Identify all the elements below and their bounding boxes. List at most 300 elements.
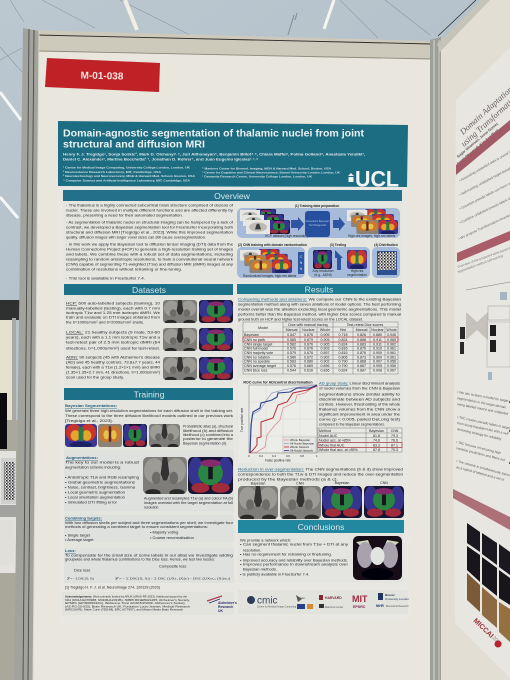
overview diagram: distribution with QR code bbox=[372, 243, 400, 278]
overview diagram: testing: segmentation bbox=[347, 273, 367, 277]
UCL logo: UCL bbox=[355, 166, 399, 192]
bayesian segmentations: likelihood (b) and diffusion bbox=[183, 429, 233, 433]
AD results table: 83.3 bbox=[373, 443, 380, 447]
poster id label bbox=[45, 58, 160, 92]
right poster lower text: segmentation in the target domain. bbox=[457, 396, 507, 410]
logo: Alzheimer's Research UK: Alzheimer's bbox=[218, 601, 237, 605]
augmentations: • Anisotropic T1w and RGB resampling bbox=[65, 474, 139, 480]
results intro text: ground truth on HCP and higher test-retest scores on the LOCAL dataset. bbox=[238, 316, 363, 322]
datasets heading: Datasets bbox=[132, 285, 166, 295]
AD results table: Nuclei acc. at ≈85% bbox=[319, 439, 352, 443]
right poster small bullets bbox=[509, 402, 510, 463]
highlighted row bbox=[243, 337, 398, 342]
background: neighbouring booth and floor at left bbox=[0, 300, 20, 680]
right poster lower text: denoising strategy for reliability bbox=[457, 427, 502, 441]
panel: training bbox=[64, 388, 234, 590]
ROC legend: All-Nuclei Bayesian bbox=[290, 442, 315, 446]
results table: CNN majority vote bbox=[244, 351, 273, 355]
right poster network diagram bbox=[460, 282, 510, 380]
bayesian segmentations: likelihood (c) combined into a bbox=[183, 433, 233, 437]
overview text: combination of resolutions without retraining or fine-tuning. bbox=[66, 266, 182, 272]
results table: 0.585 bbox=[287, 338, 296, 342]
overview diagram: training data preparation: HCP dataset (high resolution) bbox=[265, 234, 308, 238]
results table: 0.718 bbox=[338, 333, 348, 337]
AD group study text: thalamus volumes from the CNN show a bbox=[319, 406, 401, 412]
overview diagram: CNN training: (2) CNN training with domain randomisation bbox=[238, 243, 307, 247]
results table: 0.826 bbox=[357, 333, 366, 337]
combining targets: With two diffusion shells per subject and three segmentations per shell, we investigate four bbox=[65, 520, 234, 525]
AD results table: 79.3 bbox=[391, 434, 398, 438]
overview heading: Overview bbox=[214, 191, 251, 201]
results table: 0.909 bbox=[373, 351, 382, 355]
curve: whole bayesian bbox=[250, 386, 317, 453]
axis labels: 1 bbox=[316, 454, 318, 458]
results table: CNN no rotation bbox=[244, 355, 270, 359]
conclusions text: resolution. bbox=[243, 548, 261, 552]
loss bbox=[64, 548, 234, 583]
AD results table: 76.6 bbox=[391, 439, 398, 443]
results table: 0.962 bbox=[387, 342, 396, 346]
top frame beam bbox=[24, 30, 431, 59]
overview text: · The thalamus is a highly connected subcortical brain structure comprised of dozens of bbox=[66, 202, 234, 208]
results heading: Results bbox=[305, 284, 333, 294]
overview diagram: testing: (3) Testing bbox=[330, 243, 346, 247]
results table: 0.544 bbox=[287, 368, 296, 372]
acknowledgements: Acknowledgements: Work primarily funded by ARUK (ARUK-RF-2023). Additional support by the bbox=[65, 594, 187, 598]
right poster lower text: variation predictions and filters out bbox=[456, 446, 505, 462]
HCP dataset text bbox=[66, 300, 161, 324]
results table: 0.680 bbox=[304, 360, 313, 364]
acknowledgements: (MRC/UKRI), Marie Curie (765148), ERC (677697), and Miriam Marks Brain Research bbox=[65, 608, 183, 612]
overview diagram: training data preparation: Generative Bayesian bbox=[305, 219, 330, 223]
background: exhibition hall ceiling bbox=[0, 0, 510, 320]
HCP dataset text: manually-labelled (testing), each with 0.7 mm bbox=[66, 306, 161, 310]
combining targets bbox=[64, 515, 234, 542]
overview diagram: distribution with QR code: (4) Distribution bbox=[374, 243, 398, 247]
loss: groupwise and whole thalamus contributions to the Dice loss. Hence, we test two losses: bbox=[65, 556, 215, 562]
title: structural and diffusion MRI bbox=[63, 138, 205, 150]
overview text: and labels. We combine these with a robust set of data augmentations, including bbox=[66, 252, 233, 256]
conclusions text: We provide a network which: bbox=[240, 538, 291, 542]
combining targets: methods of generating a combined target to ensure consistent segmentations: bbox=[65, 524, 208, 529]
AD results table: 74.6 bbox=[373, 439, 380, 443]
over-segmentation text: correspondence to both the T1w & DTI images and reduce the over-segmentation bbox=[238, 472, 403, 476]
diagonal roof beam bbox=[437, 0, 490, 52]
conclusions heading: Conclusions bbox=[298, 522, 344, 532]
right poster title: Sugar Ghamsari, Jesse Gomez bbox=[456, 122, 499, 159]
AD results table: Whole thal AUC bbox=[319, 443, 345, 447]
bayesian segmentations: We generate three high-resolution segmentations for each diffusion shell in the training set. bbox=[65, 408, 233, 413]
conclusions heading bbox=[238, 520, 404, 533]
results heading bbox=[237, 284, 402, 294]
right poster image grid bbox=[467, 523, 510, 642]
logo: Brunel and NIHR: NIHR bbox=[376, 604, 384, 608]
AD group study text: of nuclei volumes from the CNN & Bayesian bbox=[319, 386, 400, 390]
augmentations: images overlaid with the target segmentation at full bbox=[144, 501, 233, 505]
logo: Brunel and NIHR: University London bbox=[385, 597, 409, 601]
overview text: (CNN) capable of segmenting T1-weighted (T1w) and diffusion MRI (dMRI) images at any bbox=[66, 262, 233, 266]
affiliations: ⁵ Martinos Center for Biomed. Imaging, MGH & Harvard Med. School, Boston, USA bbox=[202, 166, 332, 170]
results table: 0.956 bbox=[387, 364, 396, 368]
results table: 0.905 bbox=[320, 338, 330, 342]
bayesian segmentations: Probabilistic atlas (a), structural bbox=[183, 424, 233, 428]
overview diagram: testing: High-res bbox=[351, 269, 364, 273]
AD results table: Whole thal acc. at ≈85% bbox=[319, 448, 359, 452]
overview text: · This tool is available in FreeSurfer 7.4. bbox=[66, 276, 145, 280]
results intro text: model overall was the ablation excluding local geometric augmentations. This model bbox=[238, 306, 401, 312]
results table: 0.873 bbox=[357, 355, 366, 359]
over-segmentation text: produced by the Bayesian methods (a & c). bbox=[238, 476, 338, 482]
results intro text: performs better than the Bayesian method, with higher Dice scores compared to manual bbox=[238, 312, 401, 316]
curve: whole network bbox=[250, 386, 317, 453]
logo: MIT and EPSRC bbox=[352, 594, 368, 609]
right poster conference logo bbox=[472, 617, 503, 648]
AD group study text: significant improvement in area under the bbox=[319, 412, 401, 416]
conclusions text bbox=[240, 538, 349, 576]
overview diagram: training data preparation bbox=[237, 204, 400, 238]
ROC chart: ROC curve for AD/control discrimination bbox=[243, 380, 313, 384]
overview diagram: CNN training: Randomized images, high-res labels bbox=[243, 274, 297, 278]
results table: 0.672 bbox=[304, 355, 313, 359]
affiliations bbox=[63, 166, 341, 182]
loss: Dice loss bbox=[74, 568, 90, 572]
dataset images bbox=[163, 300, 233, 382]
loss: Composite loss bbox=[159, 564, 186, 568]
LOCAL dataset text bbox=[66, 330, 161, 350]
affiliations: ⁶ Centre for Cognitive and Clinical Neuroscience, Brunel University London, London, UK bbox=[202, 170, 341, 174]
results table: 0.961 bbox=[387, 351, 396, 355]
conclusions text: • Can segment thalamic nuclei from T1w + DTI at any bbox=[240, 542, 348, 546]
overview diagram: training data preparation: (1) Training data preparation bbox=[295, 204, 339, 208]
ADNI dataset text bbox=[66, 354, 161, 380]
logo: Alzheimer's Research UK: UK bbox=[218, 609, 223, 613]
logo: MIT and EPSRC: EPSRC bbox=[353, 605, 366, 609]
HCP dataset text: the b=1000s/mm² and b=2000s/mm² shells. bbox=[66, 320, 144, 324]
results table: 0.911 bbox=[373, 342, 382, 346]
overview diagram: testing: (e.g., ADNI) bbox=[314, 273, 332, 277]
curve: nuclei network bbox=[250, 385, 317, 453]
logo: Alzheimer's Research UK: Research bbox=[218, 605, 233, 609]
AD group study text: AD group study: Linear discriminant analysis bbox=[319, 380, 400, 386]
AD results table: 70.3 bbox=[391, 448, 398, 452]
results table: 0.616 bbox=[304, 368, 313, 372]
logo: MIT and EPSRC: MIT bbox=[352, 594, 368, 604]
panel: datasets bbox=[64, 284, 233, 385]
right poster lower text: • We aim to learn a model for target bbox=[457, 390, 509, 403]
augmentations: • Local geometric augmentation bbox=[65, 490, 125, 494]
results table: 0.956 bbox=[387, 360, 396, 364]
results table: 0.836 bbox=[320, 368, 330, 372]
overview diagram: CNN training: C bbox=[300, 255, 303, 259]
results table: 0.816 bbox=[338, 347, 348, 351]
results table: 0.867 bbox=[357, 364, 366, 368]
arrow bbox=[291, 217, 304, 231]
augmentations: The key to our model is a robust bbox=[65, 460, 140, 464]
results table: 0.576 bbox=[287, 347, 296, 351]
results table: CNN full model bbox=[244, 347, 268, 351]
overview text bbox=[66, 202, 234, 280]
logo: partners: Brain bbox=[298, 596, 305, 600]
over-segmentation text: Reduction in over-segmentation: The CNN segmentations (b & d) show improved bbox=[238, 466, 403, 472]
right poster lower text: from being fraudulent but with a self bbox=[457, 421, 509, 436]
ADNI dataset text: (AD) and 45 healthy controls, 73.8±7.7 years, 44 bbox=[66, 360, 161, 364]
highlighted row bbox=[318, 443, 402, 447]
results table: 0.790 bbox=[338, 364, 348, 368]
conclusions text: • Improved accuracy and reliability over Bayesian methods. bbox=[240, 558, 348, 562]
results table: Whole bbox=[386, 328, 397, 332]
authors: Daniel C. Alexander¹, Martina Bocchetta²˒⁷, Jonathan D. Rohrer⁷, and Juan Eugenio Iglesias¹˒³˒⁴ bbox=[63, 156, 258, 162]
logo: partners bbox=[296, 595, 344, 609]
augmentations: resolution. bbox=[144, 506, 159, 510]
results table: 0.676 bbox=[304, 347, 313, 351]
logo: cmic: Centre for Medical Image Computing bbox=[257, 606, 297, 608]
logo: Alzheimer's Research UK bbox=[207, 596, 237, 613]
over-segmentation images: CNN bbox=[380, 481, 388, 485]
results table: 0.908 bbox=[373, 368, 382, 372]
results table: 0.907 bbox=[373, 360, 382, 364]
augmentations: • Simulated DTI fitting error bbox=[65, 500, 118, 504]
overview text: · In this work we apply the Bayesian tool to diffusion tensor imaging (DTI) data from the bbox=[66, 242, 234, 246]
results table: 0.876 bbox=[357, 351, 366, 355]
AD group study text: discriminate between AD subjects and bbox=[319, 396, 400, 402]
HCP dataset text: train and evaluate on DTI images obtained from bbox=[66, 314, 161, 320]
title banner bbox=[58, 121, 408, 192]
right poster maroon band 2 bbox=[457, 231, 510, 262]
right poster title: Department of Medical Imaging bbox=[456, 142, 491, 172]
AD group study text: segmentations show similar ability to bbox=[319, 392, 401, 396]
augmentations: augmentation scheme including: bbox=[65, 464, 121, 470]
over-segmentation images: Bayesian bbox=[335, 481, 349, 485]
results table: 0.961 bbox=[387, 347, 396, 351]
training heading bbox=[64, 388, 233, 400]
affiliations: ⁷ Dementia Research Centre, University College London, London, UK bbox=[202, 174, 313, 178]
results table: 0.583 bbox=[287, 360, 296, 364]
LOCAL dataset text: test-retest pair of 2.5 mm isotropic dMRI (64 bbox=[66, 340, 161, 344]
results table: 0.909 bbox=[373, 355, 382, 359]
ROC legend: All-Nuclei Network bbox=[290, 448, 313, 452]
ADNI dataset text: (1.35×1.35×2.7 mm, 41 directions, b=1,000s/mm²) bbox=[66, 370, 161, 374]
AD group study text: compared to the Bayesian segmentations. bbox=[319, 422, 385, 426]
results intro text bbox=[238, 296, 401, 322]
panel: overview bbox=[63, 190, 402, 282]
results table: 0.902 bbox=[320, 360, 330, 364]
AD results table: 81.8 bbox=[373, 434, 380, 438]
conclusions text: • Improves performance in downstream analysis over bbox=[240, 562, 349, 566]
right poster lower text: • TAC creates pseudo labels in target bbox=[457, 415, 510, 430]
title bbox=[63, 128, 365, 150]
results table: 0.883 bbox=[357, 342, 366, 346]
overview diagram: testing bbox=[308, 243, 370, 278]
results table: CNN average target bbox=[244, 364, 276, 368]
conclusions image: white matter rendering bbox=[353, 536, 402, 580]
panel: results bbox=[237, 284, 404, 521]
logo: partners: HARVARD bbox=[325, 596, 342, 600]
overview diagram: training data preparation: Tool Diagnostic bbox=[309, 223, 327, 227]
overview text: Human Connectome Project (HCP) to generate a high-resolution training set of images bbox=[66, 246, 233, 252]
bayesian segmentations: These correspond to the three diffusion likelihood models outlined in our previous work bbox=[65, 413, 233, 418]
overview diagram: CNN training: N bbox=[300, 267, 303, 271]
bayesian segmentations: [Tregidgo et al., 2023]. bbox=[65, 418, 113, 423]
overview heading bbox=[63, 190, 402, 201]
LOCAL dataset text: directions, b=1,000s/mm²) used for test-retest. bbox=[66, 346, 160, 350]
reference: [1] Tregidgo H. F. J. et al. NeuroImage 274, 120129 (2023) bbox=[65, 586, 160, 590]
results table: 0.824 bbox=[338, 338, 348, 342]
right frame post bbox=[430, 37, 441, 680]
bayesian segmentations bbox=[65, 403, 233, 449]
results table: 0.806 bbox=[338, 355, 348, 359]
bayesian segmentations: posterior to generate the bbox=[183, 437, 233, 441]
right poster lower text: using labeled source and unlabeled bbox=[457, 402, 509, 416]
overview diagram: testing: Any resolution bbox=[313, 269, 334, 273]
results table: CNN single target bbox=[244, 342, 272, 346]
right neighbouring board bbox=[436, 0, 510, 680]
results table: 0.905 bbox=[320, 342, 330, 346]
AD results table: Bayesian bbox=[369, 429, 384, 433]
right poster lower text: • TAC focuses on ensuring high bbox=[456, 440, 501, 455]
results table: 0.897 bbox=[320, 351, 330, 355]
AD group study text: controls. However, thresholding of the whole bbox=[319, 402, 401, 406]
results table: CNN no speckle bbox=[244, 360, 270, 364]
poster paper bbox=[58, 121, 410, 624]
over-segmentation images bbox=[238, 481, 404, 521]
results table: Bayesian bbox=[244, 333, 259, 337]
right poster bullets bbox=[458, 148, 510, 241]
left frame post bbox=[14, 28, 39, 680]
overview text: resampling to random anisotropic resolutions, to train a convolutional neural network bbox=[66, 256, 233, 262]
logo: partners: Martinos Center bbox=[325, 605, 344, 609]
affiliations: ⁴ Computer Science and Artificial Intelligence Laboratory, MIT, Cambridge, USA bbox=[63, 178, 191, 182]
overview diagram: CNN training bbox=[237, 243, 307, 278]
right poster maroon band 1 bbox=[456, 120, 510, 175]
overview text: contrast, we developed a Bayesian segmentation tool for FreeSurfer incorporating both bbox=[66, 224, 233, 230]
AD results table: 67.8 bbox=[373, 448, 380, 452]
logo: Brunel and NIHR bbox=[376, 593, 409, 608]
results table: Dice with manual tracing bbox=[288, 323, 328, 327]
right poster method text: segmentation method self-training bbox=[457, 254, 504, 274]
results table: Whole bbox=[320, 328, 330, 332]
overview diagram: training data preparation: High-res images, high-res labels bbox=[348, 234, 396, 238]
right poster lower text bbox=[456, 390, 510, 482]
logo: Brunel and NIHR: Brunel bbox=[385, 593, 395, 597]
axis labels: 0.2 bbox=[259, 454, 263, 458]
results table: 0.580 bbox=[287, 355, 296, 359]
AD group study text bbox=[319, 380, 401, 426]
results table bbox=[243, 322, 398, 374]
ROC legend: Whole Bayesian bbox=[290, 438, 311, 442]
right poster conference logo: MICCAI bbox=[472, 617, 494, 640]
overview text: disease, presenting a need for their automated segmentation. bbox=[66, 212, 183, 218]
results table: Nuclear bbox=[371, 328, 384, 332]
loss: 𝓛 = − Σ DSC(X, Xₗ) − Σ DSC (∪Xₖ, (Xₗ)ₖ) − DSC (∪Xₜₕₐₗ, (Xₗ)ₜₕₐₗ) bbox=[115, 576, 230, 582]
LOCAL dataset text: years), each with a 1.1 mm isotropic T1w and a bbox=[66, 334, 161, 340]
logo: Brunel and NIHR: Biomedical Research bbox=[386, 605, 409, 608]
results table: 0.967 bbox=[387, 368, 396, 372]
conclusions text: • Is publicly available in FreeSurfer 7.4. bbox=[240, 572, 309, 576]
results table: 0.905 bbox=[320, 333, 330, 337]
combining targets: • Majority voting bbox=[150, 530, 178, 534]
bayesian segmentations: Bayesian segmentation (d). bbox=[183, 442, 227, 446]
AD results table: Method bbox=[319, 429, 331, 433]
overview text: structural and diffusion MRI [Tregidgo et al., 2023]. While this improved segmentation bbox=[66, 230, 233, 234]
affiliations: ² Neuroscience Research Laboratory, MIT, Cambridge, USA bbox=[63, 170, 162, 174]
ADNI dataset text: female), each with a T1w (1.2×1×1 mm) and dMRI bbox=[66, 364, 160, 370]
authors: Henry F. J. Tregidgo¹, Sonja Soskic², Mark D. Olchanyi³˒⁴, Juri Althonayan⁵, Benjamin Billot⁴˒⁶, Chiara Maffei³, Polina Golland⁴, Anastasia Yendiki³, bbox=[63, 152, 365, 156]
results table: 0.965 bbox=[387, 338, 396, 342]
conclusions text: • Has no requirement for retraining or finetuning. bbox=[240, 552, 332, 556]
LOCAL dataset text: LOCAL: 21 healthy subjects (9 male, 53-60 bbox=[66, 330, 161, 334]
title: Domain-agnostic segmentation of thalamic nuclei from joint bbox=[63, 128, 365, 140]
logo: cmic: cmic bbox=[257, 596, 278, 606]
authors bbox=[63, 152, 365, 162]
right poster conference logo: 2024 bbox=[490, 634, 503, 647]
results table: 0.911 bbox=[373, 338, 382, 342]
HCP dataset text: HCP: 600 auto-labelled subjects (training), 10 bbox=[66, 300, 161, 306]
poster id label: M-01-038 bbox=[80, 70, 124, 83]
logo strip bbox=[238, 590, 409, 614]
acknowledgements: NIH (R01AG070988, R01MH123195), NIBIB R01EB021265, Alzheimer's Society, bbox=[65, 598, 190, 602]
axis labels bbox=[240, 408, 318, 462]
acknowledgements: EPSRC (EP/R006032/1), Wellcome Trust 221915/Z/20/Z, Alzheimer's Society bbox=[65, 601, 186, 605]
arrow bbox=[333, 217, 345, 231]
augmentations: Augmentations: bbox=[66, 455, 98, 460]
AD results table: CNN bbox=[391, 429, 399, 433]
results table: CNN Dice loss bbox=[244, 368, 268, 372]
axis labels: 0.6 bbox=[286, 454, 290, 458]
results table: 0.868 bbox=[357, 360, 366, 364]
axis labels: 0.4 bbox=[272, 454, 276, 458]
overview diagram: CNN training: N bbox=[300, 261, 303, 265]
results table: 0.579 bbox=[287, 351, 296, 355]
over-segmentation images: CNN bbox=[296, 482, 304, 486]
right poster lower text: as a hybrid of labeled and a set of bbox=[456, 465, 505, 482]
results table: 0.961 bbox=[387, 355, 396, 359]
results table: 0.676 bbox=[304, 333, 313, 337]
augmentations: • Local orientation augmentation bbox=[65, 494, 125, 500]
acknowledgements: (AS-PG-20-033), Brain Research UK, Fondation Louis-Jeantet, Medical Research bbox=[65, 604, 190, 608]
ADNI dataset text: ADNI: 90 subjects (45 with Alzheimer's disease bbox=[66, 354, 161, 360]
loss: 𝓛 = − Σ DSC(X, Xₗ) bbox=[67, 576, 94, 582]
AD results table: Nuclei AUC bbox=[319, 434, 338, 438]
results table: 0.676 bbox=[304, 342, 313, 346]
panel: conclusions bbox=[238, 520, 404, 583]
overview text: quality, diffusion images with larger voxel sizes can still cause oversegmentation. bbox=[66, 234, 206, 240]
bayesian segmentations: Bayesian Segmentations: bbox=[65, 403, 117, 408]
results table: 0.880 bbox=[373, 333, 382, 337]
results table: 0.669 bbox=[304, 364, 313, 368]
results table: 0.824 bbox=[338, 342, 348, 346]
axis labels: 0.8 bbox=[300, 454, 304, 458]
AD results table: 87.1 bbox=[391, 443, 398, 447]
over-segmentation text bbox=[238, 466, 403, 482]
augmentations bbox=[64, 450, 234, 511]
acknowledgements bbox=[62, 592, 237, 615]
right poster title: Sarah Dharmadi, Kim Sandford bbox=[456, 129, 499, 166]
results table: 0.902 bbox=[320, 355, 330, 359]
logo: cmic bbox=[247, 596, 297, 608]
results table: 0.946 bbox=[387, 333, 396, 337]
loss: Loss: bbox=[65, 548, 76, 553]
axis labels: 0 bbox=[248, 454, 250, 458]
results table: Test-retest Dice scores bbox=[347, 323, 383, 327]
training heading: Training bbox=[134, 390, 165, 400]
augmentations: • Global geometric augmentations bbox=[65, 480, 135, 484]
ROC legend: Whole Network bbox=[290, 445, 310, 449]
right poster maroon band 3 bbox=[453, 489, 510, 530]
results table: 0.576 bbox=[287, 364, 296, 368]
results table: Hist bbox=[340, 328, 346, 332]
loss: To compensate for the small size of some labels in our atlas we investigate adding bbox=[65, 552, 233, 557]
results table: 0.903 bbox=[320, 347, 330, 351]
